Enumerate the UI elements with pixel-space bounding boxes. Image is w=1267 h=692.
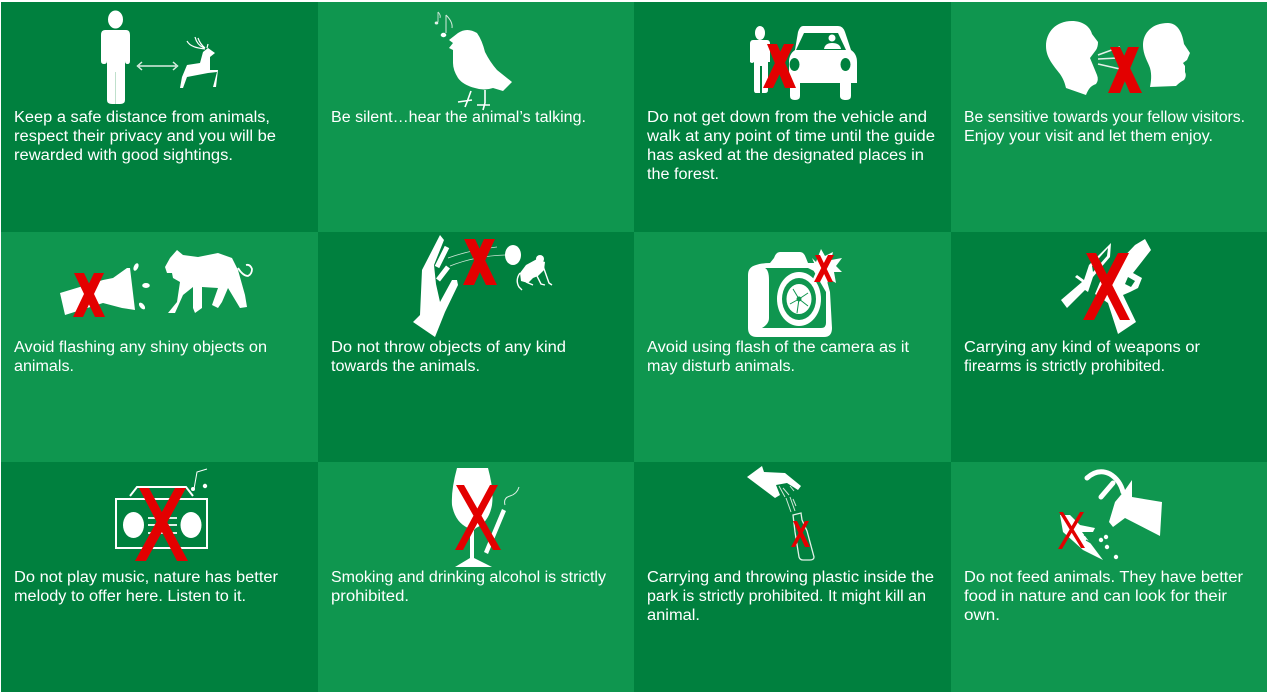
panel background xyxy=(1,232,318,462)
text: no plastic: animal. xyxy=(647,607,700,624)
text: do not feed animals: own. xyxy=(964,607,1000,624)
text: stay in the vehicle: has asked at the designated places in xyxy=(647,147,924,164)
text: keep a safe distance xyxy=(14,109,276,164)
text: weapons prohibited: Carrying any kind of weapons or xyxy=(964,339,1200,356)
panel background xyxy=(951,2,1267,232)
panel background xyxy=(951,462,1267,692)
text: no plastic: Carrying and throwing plastic inside the xyxy=(647,569,934,586)
icon: throwing hand, rock and monkey with red cross xyxy=(413,235,552,337)
panel: keep a safe distance xyxy=(1,2,318,232)
text: do not feed animals: food in nature and can look for their xyxy=(964,588,1227,605)
panel: avoid flashing shiny objects xyxy=(1,232,318,462)
text: avoid camera flash: Avoid using flash of the camera as it xyxy=(647,339,910,356)
text: no smoking or alcohol: Smoking and drinking alcohol is strictly xyxy=(331,569,606,586)
text: do not feed animals xyxy=(964,569,1243,624)
icon: person beside car with red cross xyxy=(750,26,857,100)
text: no plastic: park is strictly prohibited. It might kill an xyxy=(647,588,926,605)
panel: weapons prohibited xyxy=(951,232,1267,462)
text: weapons prohibited: firearms is strictly prohibited. xyxy=(964,358,1165,375)
text: do not play music xyxy=(14,569,278,605)
icon: radio with red cross xyxy=(116,469,207,561)
text: do not play music: Do not play music, nature has better xyxy=(14,569,278,586)
panel: be sensitive to visitors xyxy=(951,2,1267,232)
panel: be silent xyxy=(318,2,634,232)
icon: person, arrow and deer xyxy=(101,10,218,104)
text: keep a safe distance: respect their privacy and you will be xyxy=(14,128,276,145)
icon: singing bird xyxy=(435,12,512,110)
text: avoid camera flash xyxy=(647,339,910,375)
panel: no smoking or alcohol xyxy=(318,462,634,692)
text: do not feed animals: Do not feed animals. They have better xyxy=(964,569,1243,586)
panel: no plastic xyxy=(634,462,951,692)
panel background xyxy=(318,2,634,232)
text: keep a safe distance: rewarded with good sightings. xyxy=(14,147,233,164)
text: be silent: Be silent…hear the animal’s talking. xyxy=(331,109,586,126)
icon: knife and gun with red cross xyxy=(1061,239,1151,334)
panel background xyxy=(1,2,318,232)
text: stay in the vehicle: Do not get down from the vehicle and xyxy=(647,109,927,126)
panel: avoid camera flash xyxy=(634,232,951,462)
panel background xyxy=(634,462,951,692)
panel: do not throw objects xyxy=(318,232,634,462)
panel: stay in the vehicle xyxy=(634,2,951,232)
text: avoid flashing shiny objects: animals. xyxy=(14,358,74,375)
icon: torch and tiger with red cross xyxy=(60,250,252,317)
text: weapons prohibited xyxy=(964,339,1200,375)
icon: wine glass and cigarette with red cross xyxy=(452,468,519,567)
panel: do not feed animals xyxy=(951,462,1267,692)
text: stay in the vehicle xyxy=(646,109,935,183)
text: avoid flashing shiny objects: Avoid flashing any shiny objects on xyxy=(14,339,267,356)
panel background xyxy=(318,232,634,462)
text: avoid camera flash: may disturb animals. xyxy=(647,358,795,375)
text: do not throw objects xyxy=(331,339,566,375)
panel background xyxy=(634,2,951,232)
text: do not throw objects: Do not throw objects of any kind xyxy=(331,339,566,356)
text: no smoking or alcohol xyxy=(331,569,606,605)
text: be sensitive to visitors: Enjoy your visit and let them enjoy. xyxy=(964,128,1213,145)
text: no plastic xyxy=(647,569,934,624)
panel: do not play music xyxy=(1,462,318,692)
icon: camera with flash and red cross xyxy=(748,249,842,337)
icon: goat and feeding hand with red cross xyxy=(1058,472,1162,560)
text: keep a safe distance: Keep a safe distance from animals, xyxy=(14,109,270,126)
icon: two heads talking with red cross xyxy=(1046,21,1190,95)
text: be sensitive to visitors: Be sensitive towards your fellow visitors. xyxy=(964,109,1245,126)
text: do not throw objects: towards the animals. xyxy=(331,358,480,375)
panel background xyxy=(634,232,951,462)
text: do not play music: melody to offer here. Listen to it. xyxy=(14,588,246,605)
panel background xyxy=(318,462,634,692)
text: stay in the vehicle: walk at any point of time until the guide xyxy=(646,128,935,145)
text: avoid flashing shiny objects xyxy=(14,339,267,375)
icon: hand dropping plastic bottle with red cross xyxy=(747,466,814,560)
panel background xyxy=(1,462,318,692)
panel background xyxy=(951,232,1267,462)
text: stay in the vehicle: the forest. xyxy=(647,166,719,183)
text: no smoking or alcohol: prohibited. xyxy=(331,588,409,605)
text: be sensitive to visitors xyxy=(964,109,1245,145)
